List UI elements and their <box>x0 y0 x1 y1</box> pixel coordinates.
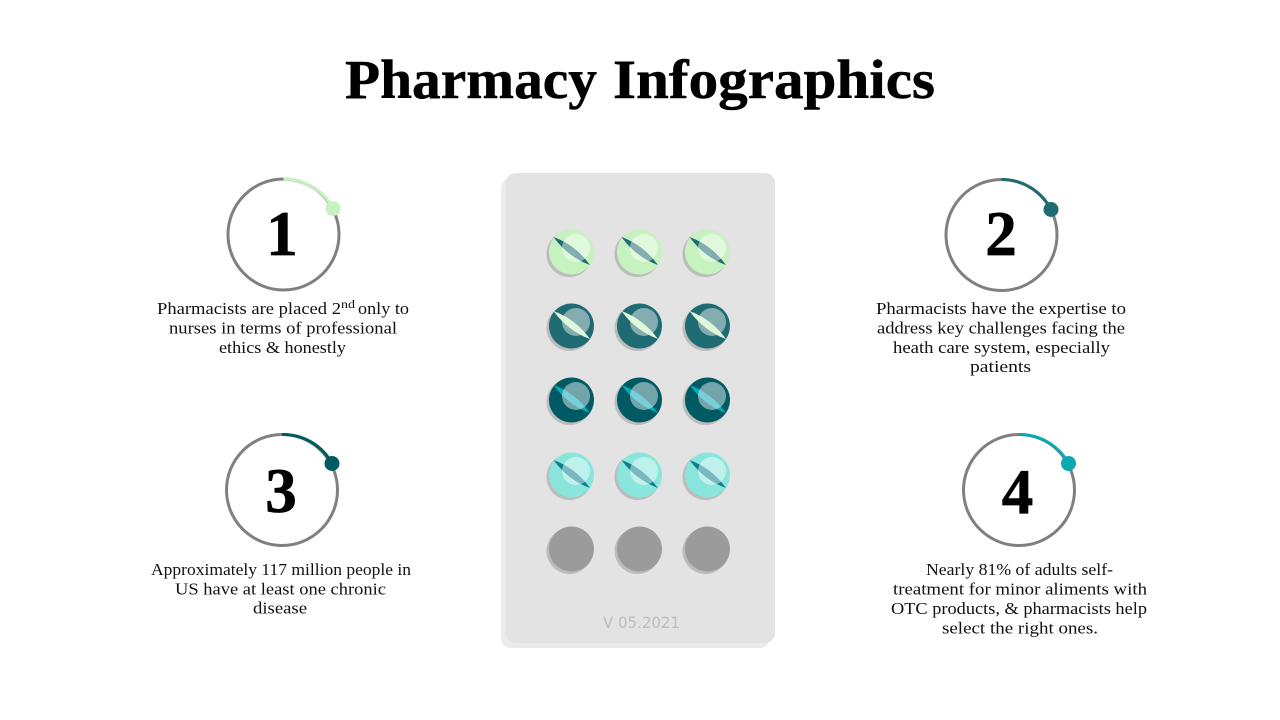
text 3: US have at least one chronic <box>175 580 386 598</box>
text 1: nd <box>341 299 355 311</box>
pill row: light green <box>546 230 730 277</box>
text 4: Nearly 81% of adults self- <box>926 560 1113 579</box>
text 3: Approximately 117 million people in <box>151 560 412 579</box>
pill row: aqua <box>546 452 730 500</box>
text 4: treatment for minor aliments with <box>893 580 1148 598</box>
text 3: disease <box>253 598 307 618</box>
title: Infographics <box>613 49 935 110</box>
text 2: patients <box>970 357 1031 376</box>
title <box>345 49 935 110</box>
pill row: empty gray <box>546 526 730 574</box>
item 2 <box>876 179 1126 376</box>
text 1: only to <box>358 299 409 318</box>
ring 3 <box>226 434 340 546</box>
number 3: 3 <box>265 456 297 526</box>
item 1 <box>157 179 409 357</box>
pill row: deep teal <box>546 378 730 425</box>
text 2: Pharmacists have the expertise to <box>876 299 1126 318</box>
ring 2 <box>946 179 1058 290</box>
text 3 <box>151 560 412 618</box>
version label: V 05.2021 <box>603 613 680 632</box>
title: Pharmacy <box>345 49 597 110</box>
text 1: Pharmacists are placed 2 <box>157 299 341 318</box>
text 4 <box>891 560 1148 638</box>
text 1 <box>157 299 409 357</box>
text 4: OTC products, & pharmacists help <box>891 599 1147 618</box>
text 1: ethics & honestly <box>219 338 347 357</box>
item 4 <box>891 434 1148 638</box>
text 4: select the right ones. <box>942 618 1098 638</box>
text 2: address key challenges facing the <box>877 318 1125 338</box>
number 4: 4 <box>1002 457 1033 527</box>
text 2 <box>876 299 1126 376</box>
ring 4 <box>964 434 1076 546</box>
text 1: nurses in terms of professional <box>169 318 397 338</box>
pill row: dark teal <box>546 304 730 351</box>
panel: pill blister pack <box>501 173 775 648</box>
number 2: 2 <box>985 199 1017 269</box>
number 1: 1 <box>266 199 298 269</box>
ring 1 <box>228 179 340 290</box>
item 3 <box>151 434 412 618</box>
text 2: heath care system, especially <box>893 338 1111 357</box>
